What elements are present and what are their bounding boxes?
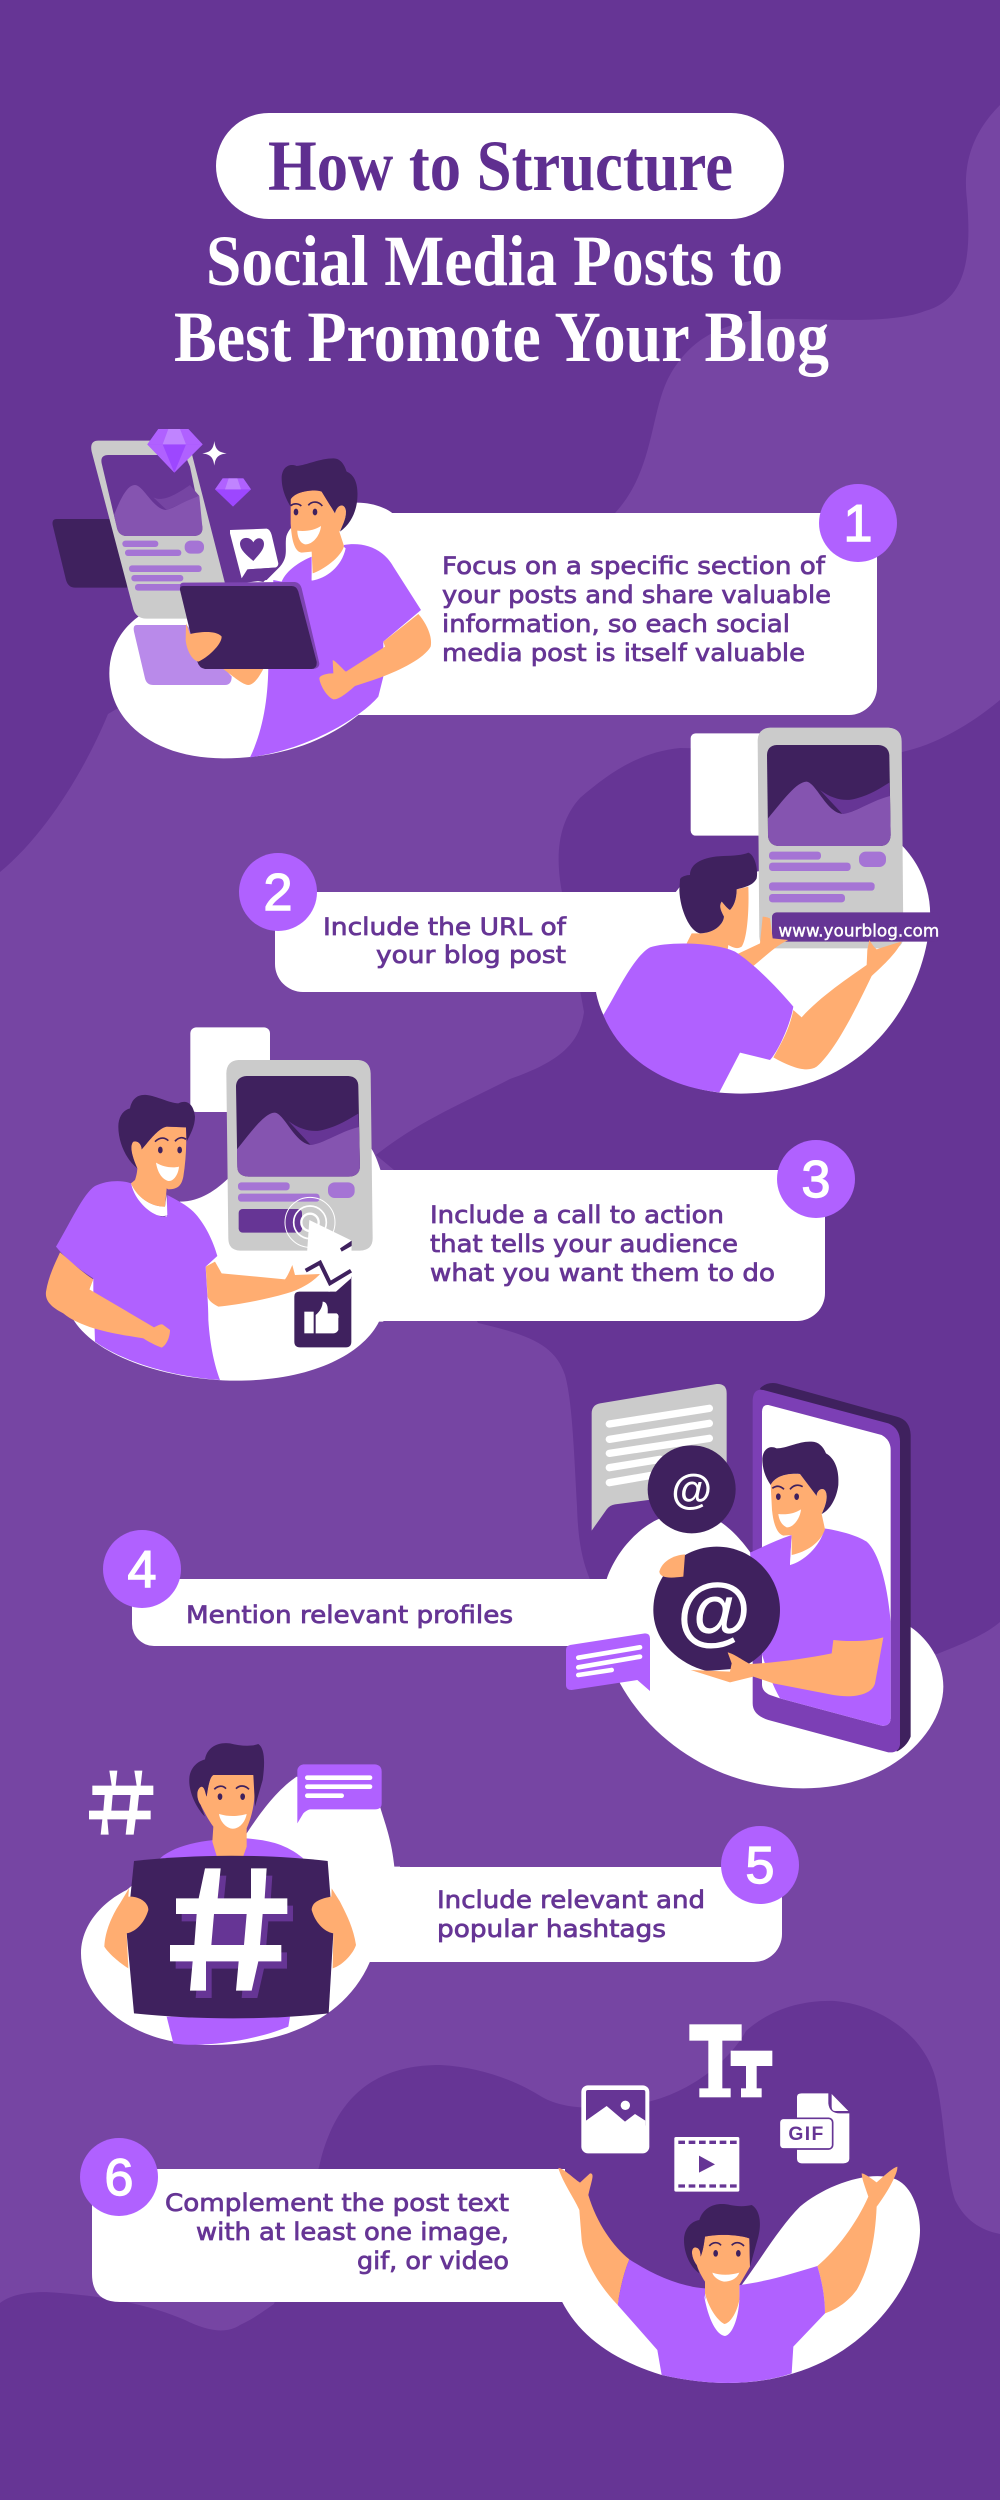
title pill: How to Structure bbox=[268, 126, 733, 206]
large @ circle: @ bbox=[677, 1569, 751, 1654]
illustration: man with tablet and phone bbox=[52, 429, 431, 757]
text: step 1 bbox=[442, 552, 831, 667]
icon: text size bbox=[689, 2024, 772, 2097]
illustration: man holding hashtag sign bbox=[89, 1743, 382, 2045]
number badge 3 bbox=[777, 1140, 855, 1218]
text: step 3: that tells your audience bbox=[430, 1230, 738, 1258]
url label bbox=[772, 912, 939, 942]
number badge 5: 5 bbox=[746, 1837, 774, 1895]
icon: heart speech bubble bbox=[230, 529, 278, 578]
text: step 6: gif, or video bbox=[357, 2247, 509, 2275]
text: step 2 bbox=[323, 913, 567, 969]
number badge 3: 3 bbox=[802, 1151, 830, 1209]
text: step 3: Include a call to action bbox=[430, 1201, 724, 1229]
text: step 4: Mention relevant profiles bbox=[186, 1601, 513, 1629]
panel: step 1 bbox=[52, 429, 897, 758]
text: step 6 bbox=[165, 2189, 509, 2275]
url label: www.yourblog.com bbox=[778, 922, 939, 941]
illustration: man holding phone with url bbox=[603, 728, 939, 1092]
text: step 3 bbox=[430, 1201, 775, 1287]
number badge 2 bbox=[239, 853, 317, 931]
illustration blob 5 bbox=[81, 1777, 400, 2045]
text: step 6: with at least one image, bbox=[196, 2218, 509, 2246]
hashtag sign bbox=[127, 1856, 333, 2018]
icon: video bbox=[674, 2137, 739, 2192]
text: step 6: Complement the post text bbox=[165, 2189, 509, 2217]
illustration: man with raised arms and media icons bbox=[540, 2024, 920, 2383]
card 2 bbox=[275, 892, 780, 992]
text: step 5 bbox=[437, 1886, 705, 1943]
icon: diamonds and sparkle bbox=[147, 429, 251, 507]
card 1 bbox=[340, 513, 877, 715]
panel: step 3 bbox=[46, 1027, 855, 1381]
large @ circle bbox=[653, 1547, 780, 1671]
text: step 2: Include the URL of bbox=[323, 913, 567, 941]
number badge 5 bbox=[721, 1826, 799, 1904]
number badge 6 bbox=[80, 2138, 158, 2216]
illustration blob 3 bbox=[70, 1147, 383, 1381]
icon: gif file: GIF bbox=[788, 2124, 824, 2145]
card 4 bbox=[132, 1579, 660, 1646]
illustration: man in phone holding @ bbox=[566, 1383, 911, 1752]
speech bubble bbox=[297, 1764, 382, 1823]
gray speech bubble bbox=[592, 1384, 727, 1531]
illustration blob 4 bbox=[607, 1518, 943, 1788]
text: step 3: what you want them to do bbox=[430, 1259, 775, 1287]
title pill bbox=[216, 113, 784, 219]
panel: step 2 bbox=[239, 728, 939, 1094]
icon: image bbox=[581, 2085, 649, 2153]
title line 3: Best Promote Your Blog bbox=[174, 297, 829, 377]
phone bbox=[753, 1383, 911, 1752]
card 5 bbox=[340, 1867, 782, 1962]
panel: step 4 bbox=[103, 1383, 943, 1788]
text: step 1: information, so each social bbox=[442, 610, 790, 638]
text: step 5: popular hashtags bbox=[437, 1915, 666, 1943]
title line 2: Social Media Posts to bbox=[206, 221, 783, 301]
number badge 2: 2 bbox=[264, 864, 292, 922]
illustration blob 1 bbox=[109, 503, 407, 758]
card 3 bbox=[340, 1170, 825, 1321]
small @ circle: @ bbox=[671, 1465, 712, 1512]
number badge 1: 1 bbox=[844, 495, 872, 553]
number badge 4 bbox=[103, 1530, 181, 1608]
text: step 5: Include relevant and bbox=[437, 1886, 705, 1914]
number badge 4: 4 bbox=[128, 1541, 156, 1599]
icon: cursor bbox=[306, 1220, 352, 1292]
icon: thumbs up bbox=[294, 1277, 351, 1347]
text: step 1: your posts and share valuable bbox=[442, 581, 831, 609]
number badge 6: 6 bbox=[105, 2149, 133, 2207]
panel: step 6 bbox=[80, 2024, 920, 2383]
icon: click target rings bbox=[285, 1197, 335, 1247]
text: step 1: Focus on a specific section of bbox=[442, 552, 826, 580]
card 6 bbox=[92, 2169, 565, 2302]
purple speech bubble bbox=[566, 1633, 650, 1691]
title bbox=[174, 113, 829, 377]
small @ circle bbox=[648, 1445, 736, 1533]
panel: step 5 bbox=[81, 1743, 799, 2045]
illustration: man clicking call to action bbox=[46, 1027, 373, 1380]
icon: small hashtag bbox=[89, 1771, 153, 1835]
text: step 2: your blog post bbox=[376, 941, 566, 969]
illustration blob 2 bbox=[596, 843, 930, 1094]
text: step 1: media post is itself valuable bbox=[442, 639, 805, 667]
number badge 1 bbox=[819, 484, 897, 562]
icon: gif file bbox=[779, 2093, 849, 2163]
